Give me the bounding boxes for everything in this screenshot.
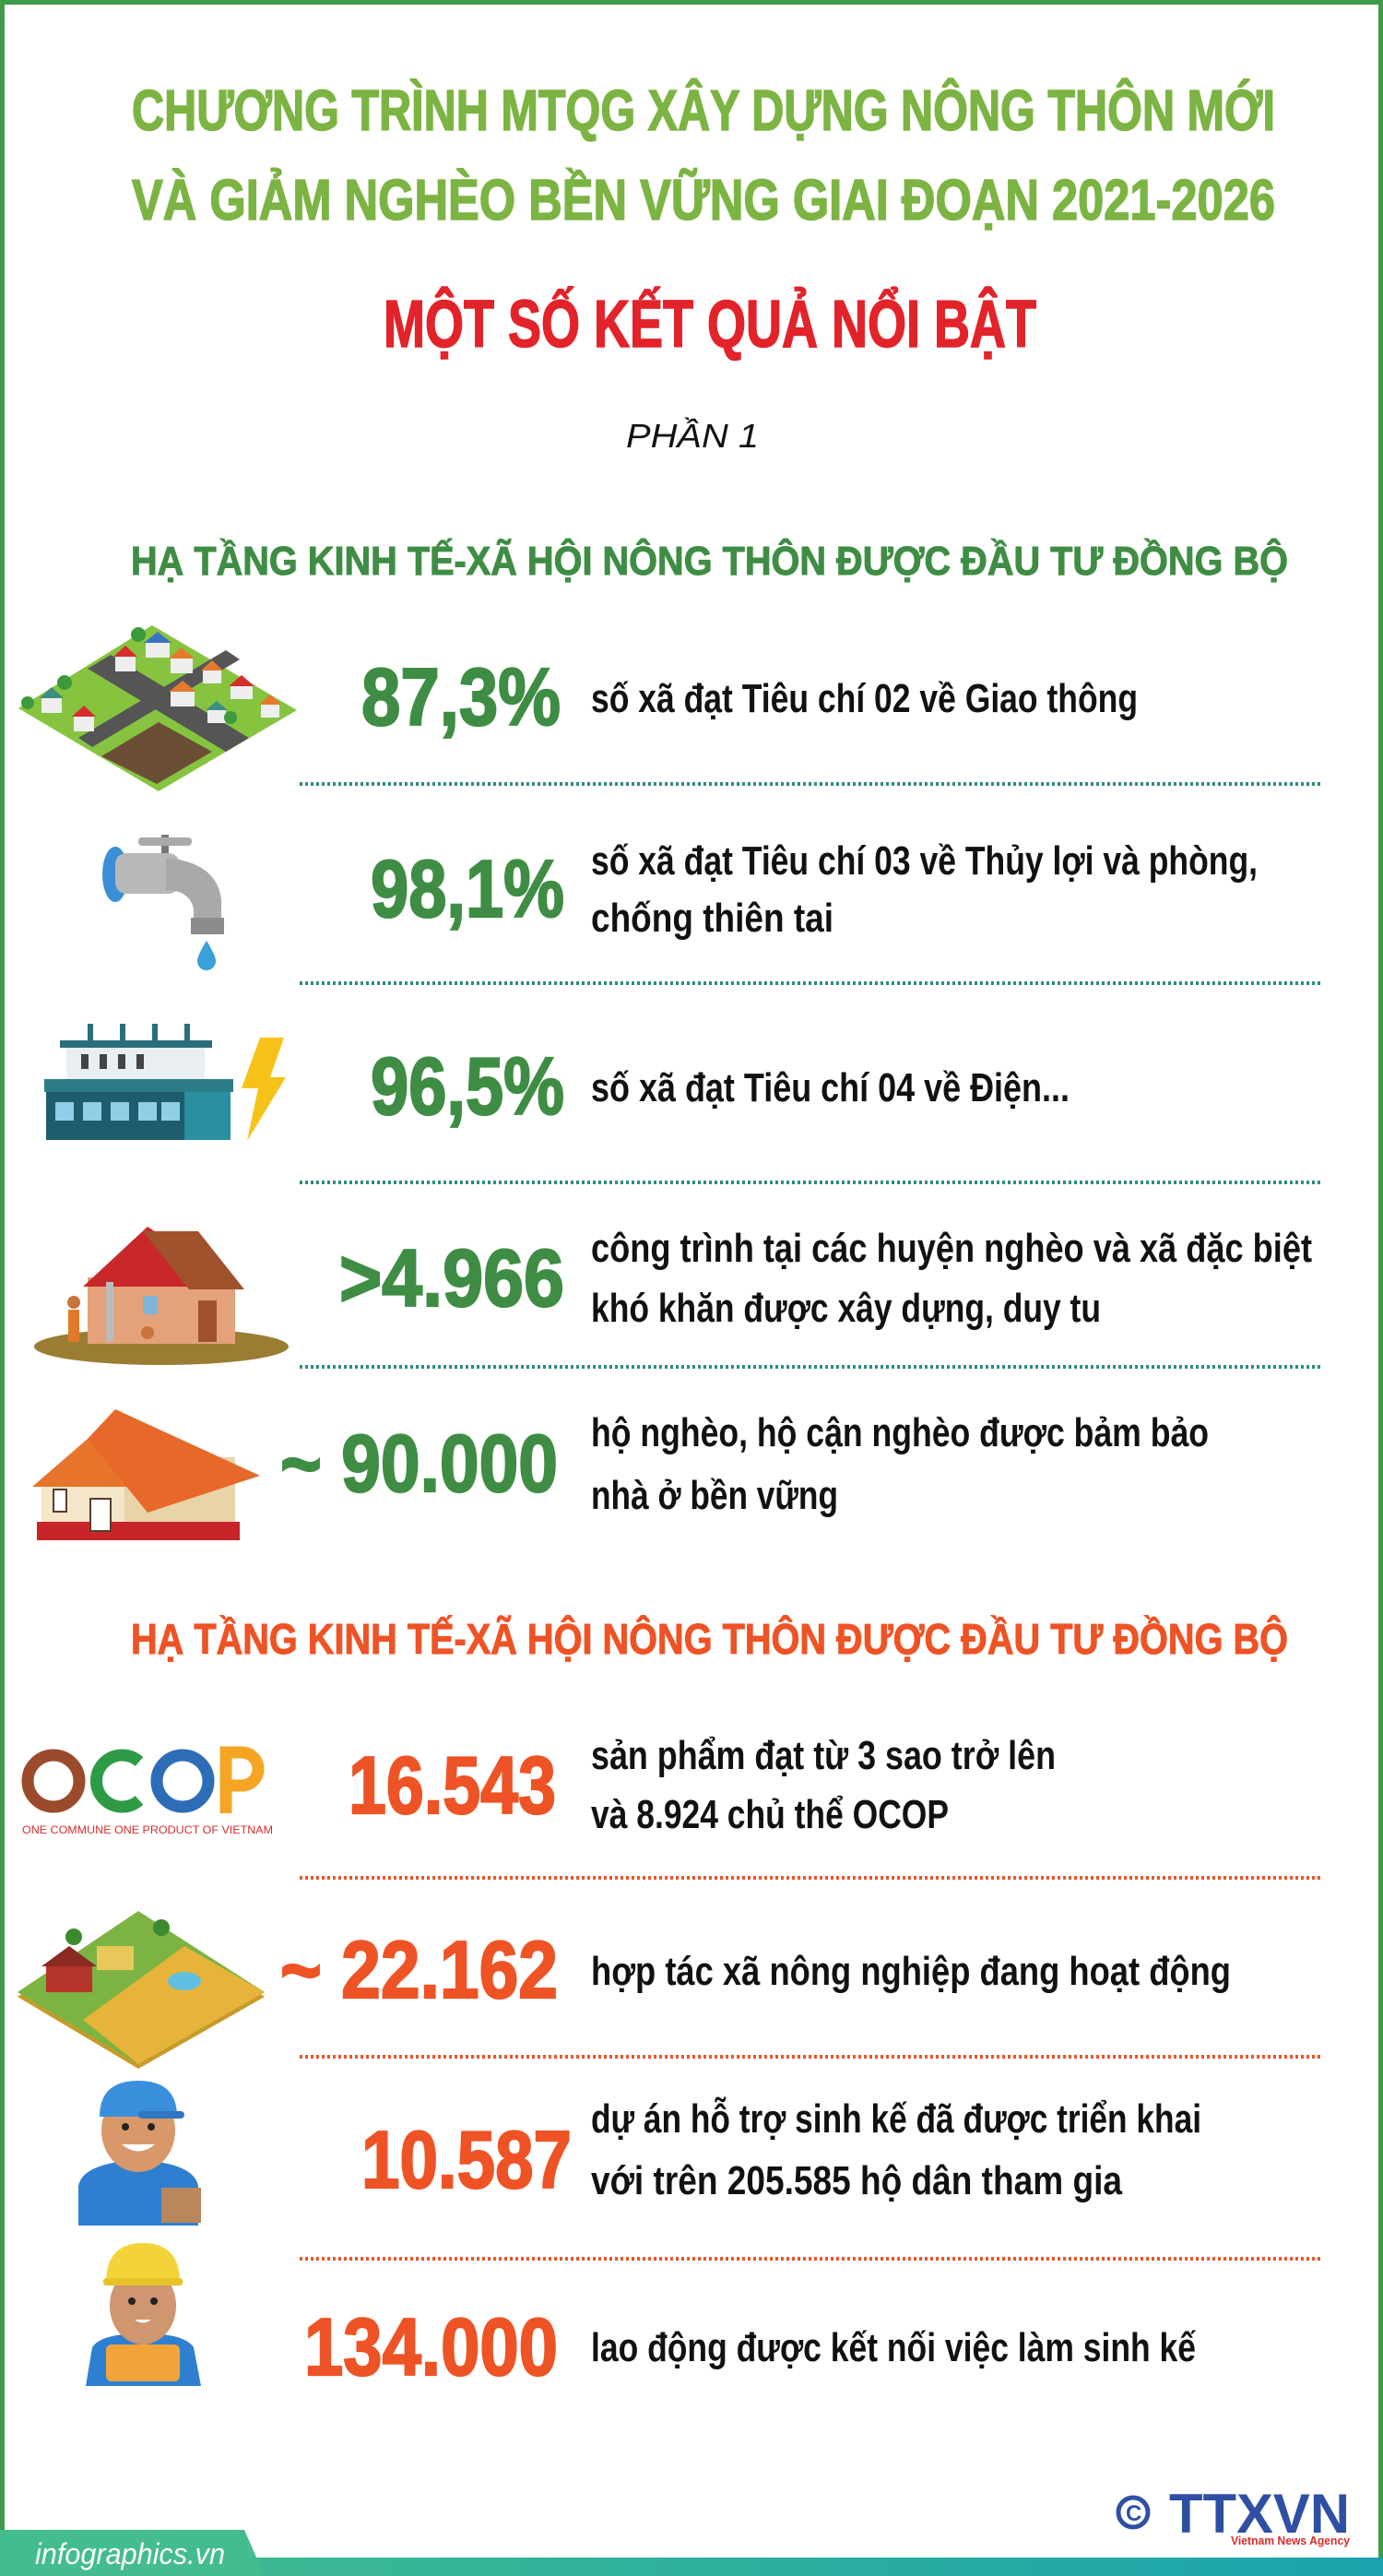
icon: village roads (18, 625, 297, 791)
stat: 10.587: với trên 205.585 hộ dân tham gia (591, 2158, 1122, 2203)
logo: TTXVN: C (1126, 2501, 1141, 2526)
stat: ~22.162: ~ 22.162 (280, 1924, 558, 2015)
stat: 10.587: 10.587 (361, 2114, 572, 2205)
stat: 134.000: lao động được kết nối việc làm sinh kế (591, 2325, 1196, 2370)
stat: 98,1% (371, 838, 1258, 941)
stat: ~22.162 (280, 1924, 1231, 2015)
stat: 10.587: dự án hỗ trợ sinh kế đã được triển khai (591, 2095, 1201, 2142)
icon: farm (18, 1911, 265, 2069)
stat: ~90.000: nhà ở bền vững (591, 1473, 838, 1518)
stat: ~90.000: hộ nghèo, hộ cận nghèo được bảm bảo (591, 1410, 1209, 1455)
icon: house construction (34, 1227, 289, 1365)
stat: >4.966: >4.966 (339, 1232, 564, 1324)
stat: 96,5%: 96,5% (371, 1040, 564, 1132)
icon: worker (86, 2243, 201, 2386)
stat: 98,1%: chống thiên tai (591, 896, 833, 941)
icon: OCOP logo (22, 1752, 273, 1836)
stat: >4.966 (339, 1226, 1312, 1331)
stat: 96,5%: số xã đạt Tiêu chí 04 về Điện... (591, 1065, 1070, 1110)
stat: 134.000: 134.000 (304, 2301, 558, 2392)
icon: delivery man (78, 2081, 201, 2226)
subtitle: MỘT SỐ KẾT QUẢ NỔI BẬT (384, 286, 1036, 362)
footer band: infographics.vn (35, 2537, 225, 2570)
stat: 16.543: và 8.924 chủ thể OCOP (591, 1792, 949, 1837)
heading: section 1: HẠ TẦNG KINH TẾ-XÃ HỘI NÔNG THÔN ĐƯỢC ĐẦU TƯ ĐỒNG BỘ (131, 537, 1288, 584)
stat: 87,3%: 87,3% (361, 651, 561, 742)
stat: 16.543: 16.543 (349, 1739, 556, 1831)
stat: ~90.000: ~ 90.000 (280, 1418, 558, 1509)
title (132, 79, 1275, 232)
stat: >4.966: khó khăn được xây dựng, duy tu (591, 1286, 1101, 1331)
stat: 87,3%: số xã đạt Tiêu chí 02 về Giao thông (591, 676, 1138, 721)
part label: PHẦN 1 (626, 417, 759, 455)
icon: OCOP logo: ONE COMMUNE ONE PRODUCT OF VIETNAM (22, 1823, 273, 1836)
stat: 134.000 (304, 2301, 1196, 2392)
stat: 10.587 (361, 2095, 1201, 2205)
stat: 87,3% (361, 651, 1138, 742)
footer band (0, 2530, 1383, 2576)
stat: 16.543: sản phẩm đạt từ 3 sao trở lên (591, 1733, 1056, 1778)
logo: TTXVN: Vietnam News Agency (1231, 2534, 1351, 2547)
icon: water tap (102, 835, 224, 970)
stat: ~22.162: hợp tác xã nông nghiệp đang hoạt động (591, 1949, 1231, 1994)
stat: 16.543 (349, 1733, 1056, 1837)
icon: power station (44, 1024, 286, 1141)
stat: 96,5% (371, 1040, 1070, 1132)
stat: 98,1%: 98,1% (371, 843, 564, 934)
logo: TTXVN: TTXVN (1169, 2483, 1350, 2545)
icon: house (32, 1409, 260, 1540)
stat: ~90.000 (280, 1410, 1209, 1518)
